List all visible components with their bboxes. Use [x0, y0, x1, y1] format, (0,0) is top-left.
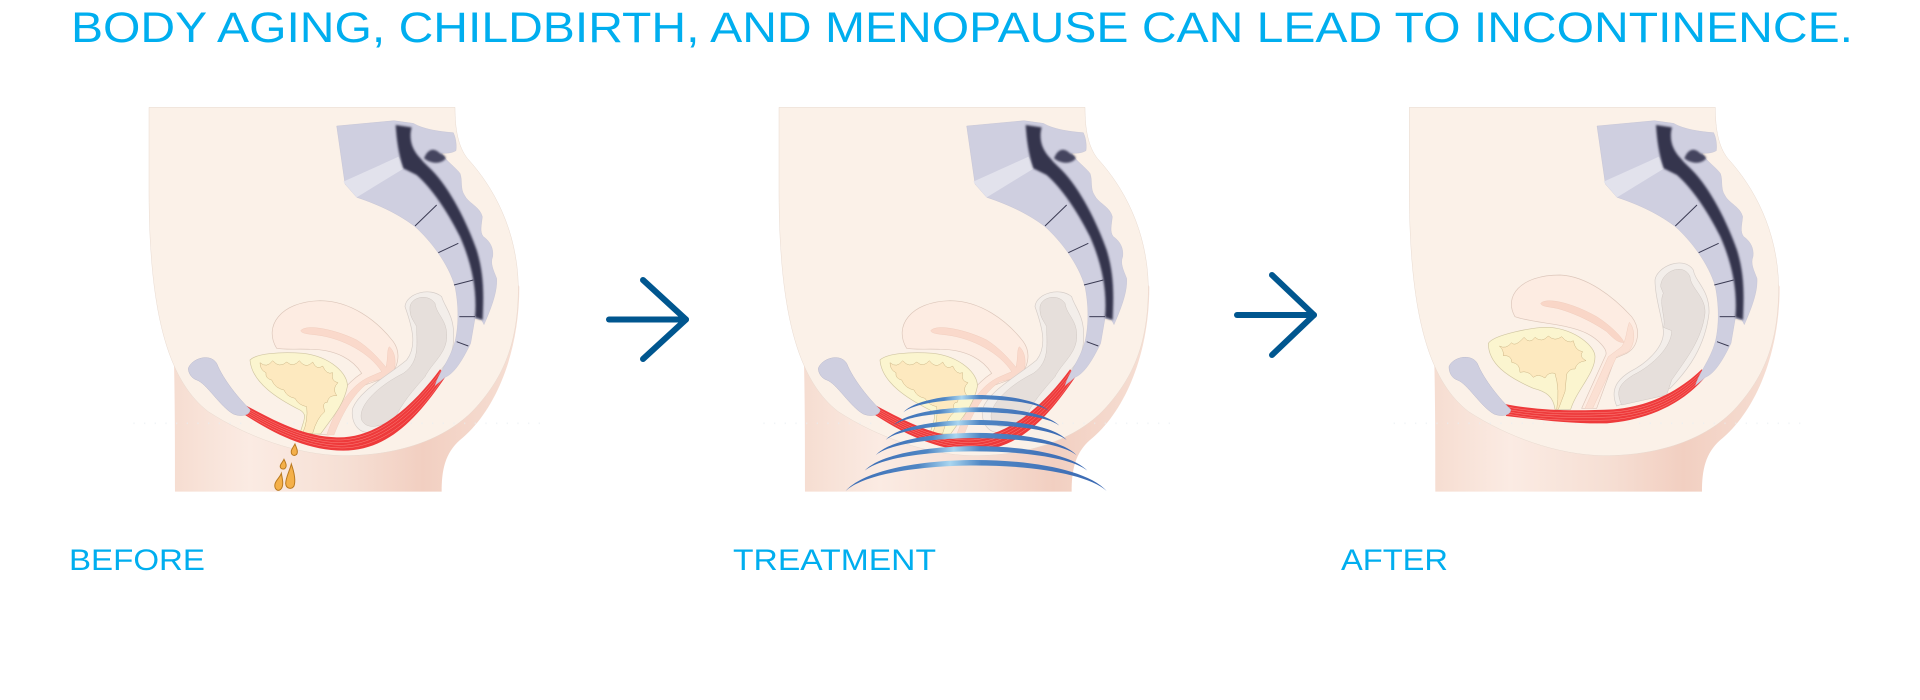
panel: after illustration [1394, 107, 1804, 492]
panel: treatment illustration [763, 107, 1173, 492]
arrow: treatment to after [1237, 275, 1314, 355]
title: BODY AGING, CHILDBIRTH, AND MENOPAUSE CAN LEAD TO INCONTINENCE. [71, 4, 1853, 52]
icon: urine drops [275, 444, 297, 490]
label: after: AFTER [1341, 544, 1448, 577]
electromagnetic waves [846, 395, 1107, 491]
label: before: BEFORE [69, 544, 205, 577]
label: treatment: TREATMENT [733, 544, 936, 577]
panel: before illustration [133, 107, 543, 492]
arrow: before to treatment [609, 280, 686, 359]
